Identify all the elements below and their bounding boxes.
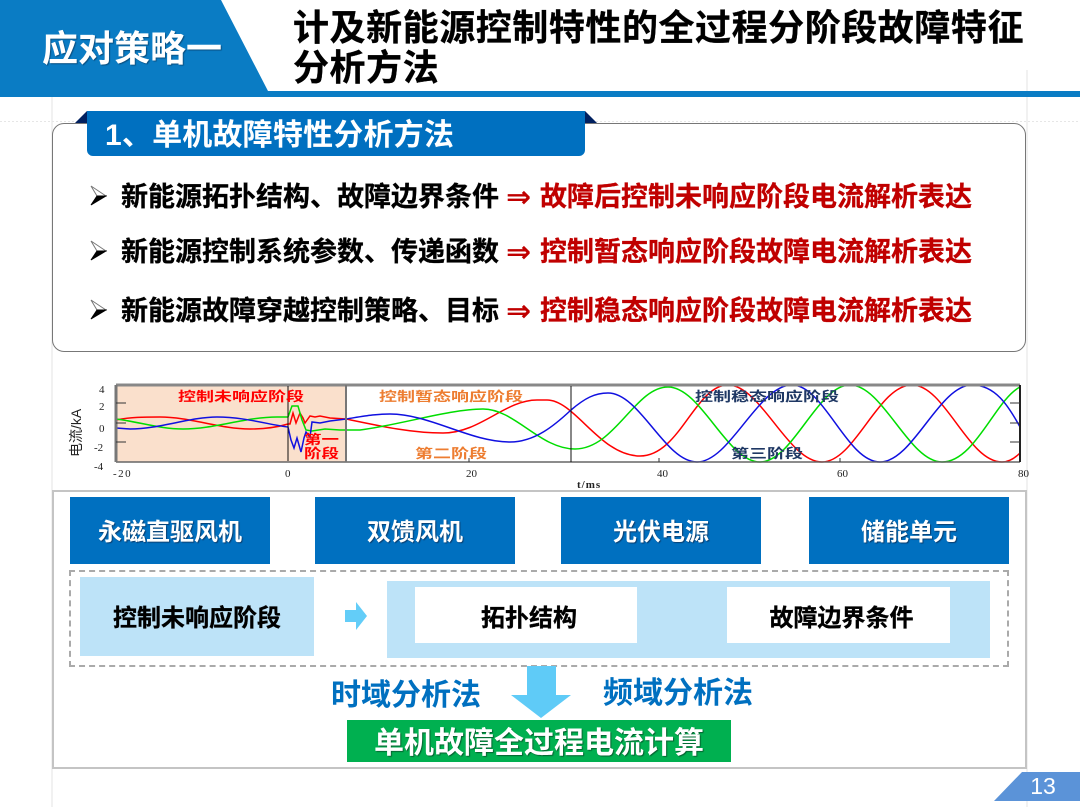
heading: strategy label: 应对策略一 [42,28,222,69]
stage labels [178,389,839,461]
axis labels: -2 [94,442,103,454]
axis labels: 0 [99,423,105,435]
box: uncontrolled stage: 控制未响应阶段 [113,605,281,632]
title [293,7,1024,88]
text: bullet 1: 新能源拓扑结构、故障边界条件 [121,182,499,212]
bullet marker 2 [90,240,107,260]
panel: light blue band [387,581,990,658]
text: bullet 2: 新能源控制系统参数、传递函数 [121,237,499,267]
box: topology [415,587,637,643]
panel heading: 1、单机故障特性分析方法 [105,119,454,152]
text: result 1: 故障后控制未响应阶段电流解析表达 [540,182,972,212]
box: full-process current calculation: 单机故障全过程电流计算 [374,726,704,760]
icon: ribbon fold left [75,111,87,123]
box: topology: 拓扑结构 [481,604,577,632]
text: result 3: 控制稳态响应阶段故障电流解析表达 [540,296,972,326]
chart: three-phase fault current waveform [68,384,1030,491]
page number: 13 [1030,773,1056,799]
arrow 1: ⇒ [506,180,531,215]
arrow 2: ⇒ [506,235,531,270]
box: full-process current calculation [347,720,731,762]
axis labels: 4 [99,384,105,396]
axis labels: 0 [285,468,291,480]
text: frequency-domain method: 频域分析法 [603,677,753,710]
axis labels: 60 [837,468,848,480]
title: 计及新能源控制特性的全过程分阶段故障特征 [293,7,1024,48]
axes and dividers [116,385,1020,462]
axis labels: 80 [1018,468,1030,480]
bullet marker 3 [90,300,107,320]
box: direct-drive wind turbine [70,497,270,564]
icon: ribbon fold right [585,111,597,123]
stage labels: 阶段 [304,446,339,461]
box: photovoltaic source [561,497,761,564]
axis labels: -4 [94,461,104,473]
x axis title: t/ms [577,479,601,491]
axis labels: 2 [99,401,104,413]
box: direct-drive wind turbine: 永磁直驱风机 [98,518,242,546]
box: energy storage unit [809,497,1009,564]
header band [0,0,1080,97]
axis labels: 40 [657,468,668,480]
bullet marker 1 [90,186,107,206]
panel heading [87,111,585,156]
box: uncontrolled stage [80,577,314,656]
page number [994,772,1080,801]
axis labels [94,384,1030,480]
stage labels: 控制未响应阶段 [178,389,304,404]
axis labels: 20 [466,468,478,480]
box: energy storage unit: 储能单元 [861,518,957,546]
box: fault boundary conditions [727,587,950,643]
icon: right arrow [345,602,367,630]
title: 分析方法 [293,47,439,88]
axis labels: -20 [113,468,132,480]
dashed group [69,570,1009,667]
phase current curves [116,385,1020,462]
box: doubly fed wind turbine: 双馈风机 [367,518,463,546]
stage labels: 第三阶段 [731,446,803,461]
text: time-domain method: 时域分析法 [331,679,481,712]
panel: single-unit analysis methods [52,123,1026,352]
text: result 2: 控制暂态响应阶段故障电流解析表达 [540,237,972,267]
stage labels: 第一 [304,432,339,447]
text: bullet 3: 新能源故障穿越控制策略、目标 [121,296,499,326]
first stage shaded area [116,385,346,462]
box: photovoltaic source: 光伏电源 [613,518,709,546]
stage labels: 控制暂态响应阶段 [379,389,523,404]
arrow 3: ⇒ [506,294,531,329]
stage labels: 第二阶段 [415,446,487,461]
box: doubly fed wind turbine [315,497,515,564]
icon: down arrow [511,666,571,718]
stage labels: 控制稳态响应阶段 [695,389,839,404]
box: fault boundary conditions: 故障边界条件 [770,604,914,632]
y axis title: 电流/kA [68,408,84,457]
panel: analysis flow [52,490,1027,769]
